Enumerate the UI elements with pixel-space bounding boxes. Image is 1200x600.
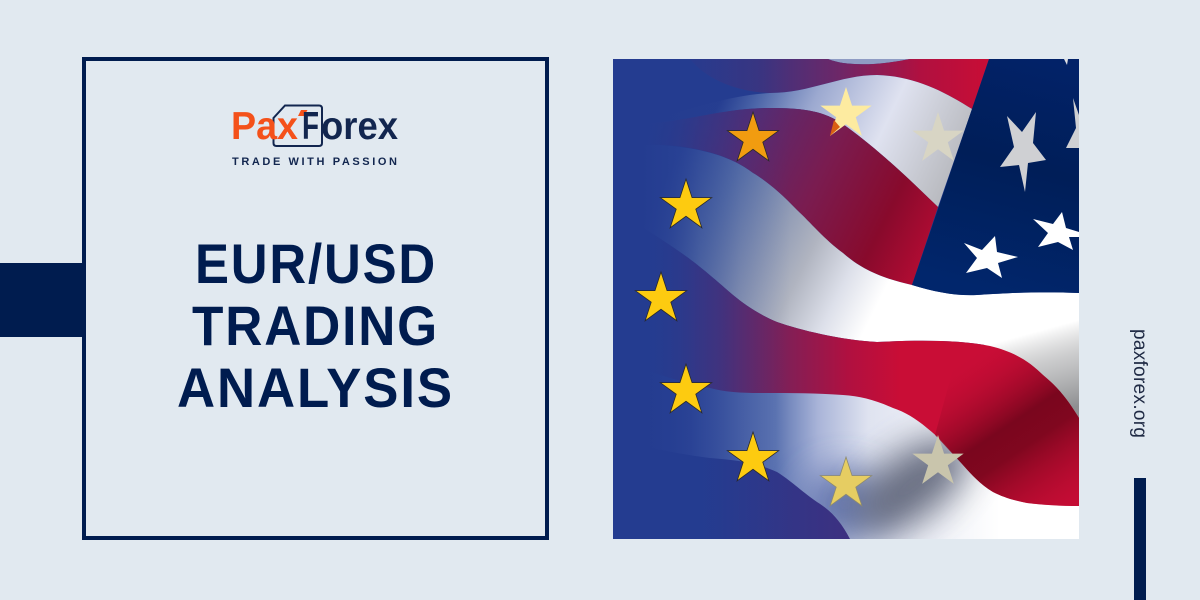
star 8 [820, 457, 872, 506]
red stripe lower shading [935, 343, 1079, 506]
title line 2: TRADING [192, 294, 439, 357]
title line 1: EUR/USD [195, 232, 437, 295]
blue field [644, 59, 1078, 345]
star tip top [1064, 59, 1068, 65]
star white left [964, 236, 1018, 278]
logo: PaxForex [231, 105, 398, 168]
website label: paxforex.org [1129, 329, 1150, 438]
title [177, 232, 454, 419]
star 1 orange tip [830, 120, 840, 136]
flag illustration: EU and US blended [613, 59, 1079, 551]
star grey partial [1066, 98, 1079, 148]
left accent bar [0, 263, 83, 337]
star 9 faded [912, 435, 964, 484]
star white right [1033, 212, 1079, 250]
star 7 [727, 432, 779, 481]
white stripe bottom [694, 345, 1079, 539]
star grey [1000, 112, 1046, 192]
red stripe lower [681, 254, 1079, 506]
blue fade bottom left [694, 456, 850, 539]
white stripe middle [668, 148, 1079, 345]
right accent bar [1134, 478, 1146, 600]
red stripe top [690, 59, 989, 109]
star 1 [820, 87, 872, 136]
logo accent tick [298, 110, 308, 116]
logo wordmark: orex: orex [321, 105, 398, 148]
grey fold on middle white stripe [996, 324, 1079, 418]
logo letter F: F [302, 105, 319, 148]
star 6 [660, 364, 712, 413]
panel: title frame [84, 59, 547, 538]
logo tagline: TRADE WITH PASSION [232, 156, 397, 168]
star 4 [660, 179, 712, 228]
blue-grey shadow on bottom white stripe [803, 469, 887, 541]
logo icon: notched rounded box [274, 106, 322, 146]
red stripe middle [678, 108, 938, 285]
canton stars [964, 59, 1079, 278]
canton [912, 59, 1079, 295]
white stripe top [722, 75, 972, 207]
star 3 orange [727, 112, 779, 161]
blue fade over the left edge [613, 112, 770, 392]
logo wordmark: Pax: Pax [231, 105, 298, 148]
title line 3: ANALYSIS [177, 356, 454, 419]
star 5 [635, 272, 687, 321]
top white sliver [828, 59, 910, 64]
grey shadow band on bottom white stripe [840, 418, 986, 539]
star 2 faded [912, 112, 964, 161]
EU star ring [635, 87, 964, 506]
